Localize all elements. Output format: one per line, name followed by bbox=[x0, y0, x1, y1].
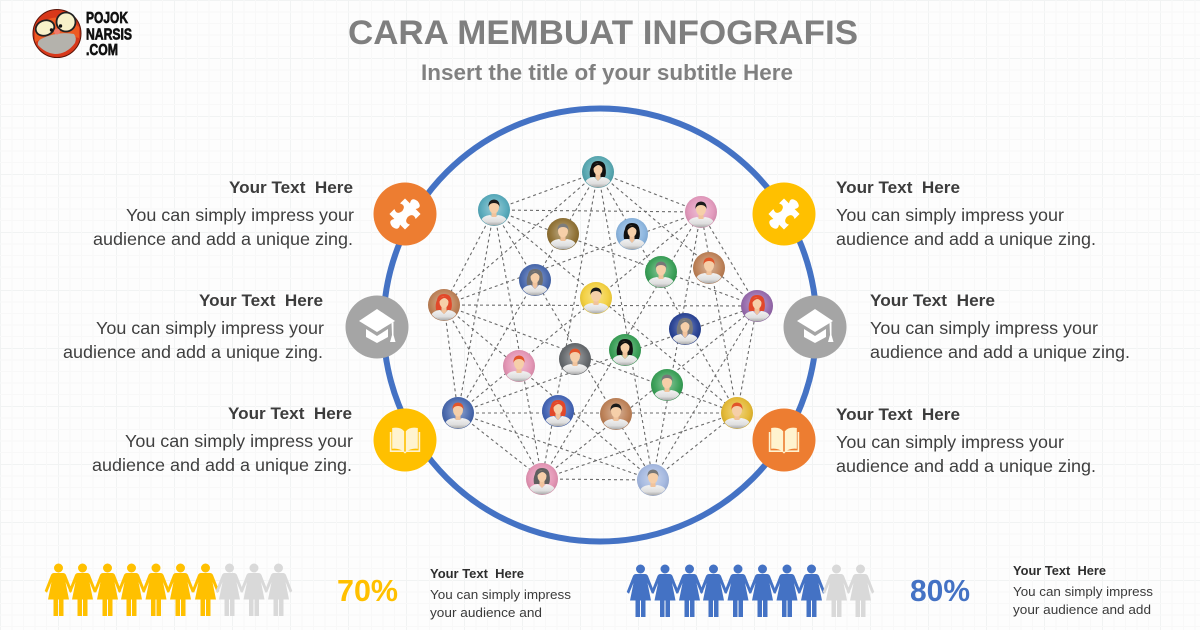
icon: orange book bbox=[752, 408, 816, 472]
text block: right bottom bbox=[836, 405, 1096, 476]
text block: bottom left: your audience and bbox=[430, 605, 542, 620]
large blue ring bbox=[384, 108, 816, 542]
text block: right middle: audience and add a unique zing. bbox=[870, 342, 1130, 362]
text block: bottom left: You can simply impress bbox=[430, 587, 572, 602]
text block: left middle: audience and add a unique zing. bbox=[63, 342, 323, 362]
icon: grey graduation cap right bbox=[784, 296, 846, 358]
text block: left middle bbox=[63, 291, 324, 362]
stat: 80%: 80% bbox=[910, 573, 970, 608]
icon: grey graduation cap left bbox=[346, 296, 408, 358]
pictogram row: 80 percent bbox=[627, 564, 874, 617]
pictogram row: 70 percent bbox=[45, 564, 292, 616]
text block: right bottom: Your Text Here bbox=[836, 405, 960, 424]
text block: bottom right: Your Text Here bbox=[1013, 564, 1106, 578]
text block: left top: audience and add a unique zing. bbox=[93, 229, 353, 249]
logo: Pojok Narsis: .COM bbox=[86, 42, 118, 59]
logo: Pojok Narsis: NARSIS bbox=[86, 26, 132, 44]
text block: right top: audience and add a unique zing. bbox=[836, 229, 1096, 249]
text block: right top: Your Text Here bbox=[836, 178, 960, 197]
logo: Pojok Narsis bbox=[33, 10, 132, 59]
logo: Pojok Narsis: POJOK bbox=[86, 10, 128, 27]
text block: bottom left: Your Text Here bbox=[430, 567, 524, 581]
icon: orange puzzle bbox=[374, 182, 436, 246]
text block: left top bbox=[93, 178, 354, 249]
text block: bottom right: your audience and add bbox=[1013, 602, 1151, 617]
network connection lines bbox=[444, 172, 757, 480]
text block: bottom left bbox=[430, 567, 572, 620]
text block: left bottom bbox=[92, 404, 353, 475]
text block: left middle: You can simply impress your bbox=[96, 318, 324, 338]
text block: right middle bbox=[870, 291, 1130, 362]
text block: left middle: Your Text Here bbox=[199, 291, 323, 310]
text block: left top: Your Text Here bbox=[229, 178, 353, 197]
text block: right top: You can simply impress your bbox=[836, 205, 1064, 225]
network avatars bbox=[428, 156, 773, 496]
text block: left bottom: Your Text Here bbox=[228, 404, 352, 423]
text block: left bottom: You can simply impress your bbox=[125, 431, 353, 451]
title: CARA MEMBUAT INFOGRAFIS bbox=[348, 14, 858, 52]
text block: bottom right: You can simply impress bbox=[1013, 584, 1154, 599]
stat: 70%: 70% bbox=[337, 573, 398, 608]
text block: right bottom: You can simply impress your bbox=[836, 432, 1064, 452]
text block: right top bbox=[836, 178, 1096, 249]
text block: bottom right bbox=[1013, 564, 1154, 617]
text block: left bottom: audience and add a unique zing. bbox=[92, 455, 352, 475]
icon: yellow book bbox=[374, 408, 436, 472]
subtitle: Insert the title of your subtitle Here bbox=[421, 60, 793, 85]
text block: right bottom: audience and add a unique zing. bbox=[836, 456, 1096, 476]
text block: right middle: You can simply impress your bbox=[870, 318, 1098, 338]
icon: yellow puzzle bbox=[752, 182, 816, 246]
text block: right middle: Your Text Here bbox=[870, 291, 995, 310]
text block: left top: You can simply impress your bbox=[126, 205, 354, 225]
